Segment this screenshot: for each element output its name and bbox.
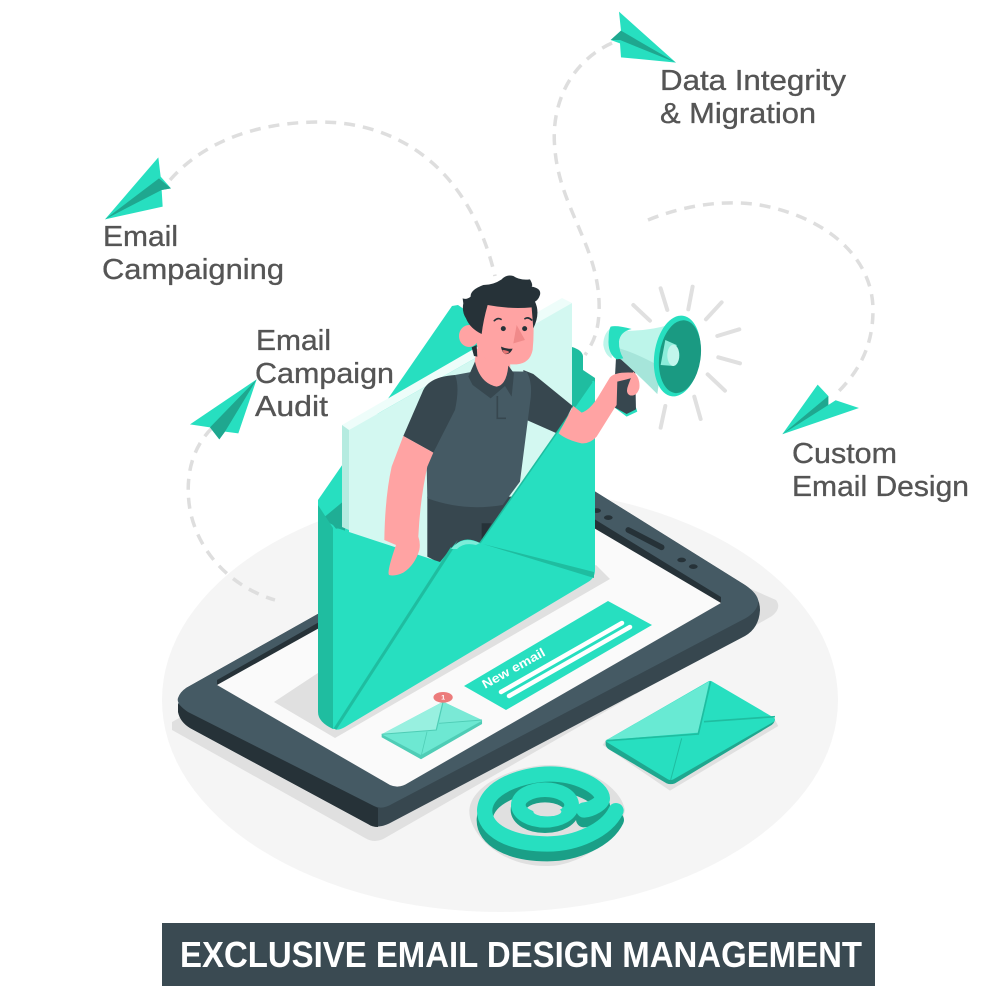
nose [513, 325, 525, 343]
notification badge [433, 692, 453, 703]
paper plane: custom email design [782, 385, 859, 434]
label: email campaign audit: Audit [255, 391, 328, 423]
small notification envelope [382, 692, 482, 759]
arm and megaphone [384, 287, 740, 575]
label: custom email design: Custom [792, 438, 897, 470]
pants [427, 497, 520, 563]
left arm [384, 436, 433, 575]
megaphone body [618, 325, 668, 394]
phone speaker and dots [592, 508, 698, 569]
eyes and brows [501, 326, 506, 331]
new email card [464, 601, 652, 710]
at sign icon [469, 765, 625, 866]
label: email campaign audit [255, 325, 394, 423]
title banner: EXCLUSIVE EMAIL DESIGN MANAGEMENT [180, 934, 862, 975]
paper plane: email campaigning [105, 157, 171, 219]
label: email campaign audit: Email [256, 325, 331, 357]
paper plane: campaign audit [190, 379, 257, 439]
large envelope icon [603, 681, 778, 791]
paper plane: data integrity [611, 12, 676, 63]
label: data integrity and migration: Data Integrity [660, 65, 847, 97]
ear [459, 325, 479, 347]
person [403, 275, 573, 563]
megaphone handle [613, 407, 637, 417]
phone [172, 474, 778, 841]
hair [463, 275, 540, 334]
thumb [627, 372, 640, 396]
letter [342, 298, 572, 560]
envelope front [318, 381, 595, 730]
label: email campaigning: Campaigning [102, 254, 284, 286]
torso [427, 371, 531, 507]
right sleeve [523, 370, 573, 434]
dashed flight paths [170, 43, 873, 600]
label: data integrity and migration [660, 65, 847, 130]
label: data integrity and migration: & Migration [660, 98, 816, 130]
envelope shadow on screen [274, 565, 610, 738]
collar [468, 362, 514, 398]
face [477, 303, 534, 364]
label: custom email design [792, 438, 969, 503]
new email card: New email [480, 645, 548, 692]
sound rays [633, 287, 740, 428]
background blob [162, 488, 838, 912]
label: email campaigning [102, 221, 284, 286]
label: custom email design: Email Design [792, 471, 969, 503]
forearm and fingers [559, 373, 634, 443]
left sleeve [403, 375, 457, 453]
label: email campaigning: Email [103, 221, 178, 253]
label: email campaign audit: Campaign [255, 358, 394, 390]
megaphone rim [649, 313, 706, 399]
neck [474, 348, 511, 387]
title banner [162, 923, 875, 986]
envelope back [318, 305, 595, 560]
mouth [501, 347, 513, 354]
small notification envelope: 1 [441, 695, 445, 701]
